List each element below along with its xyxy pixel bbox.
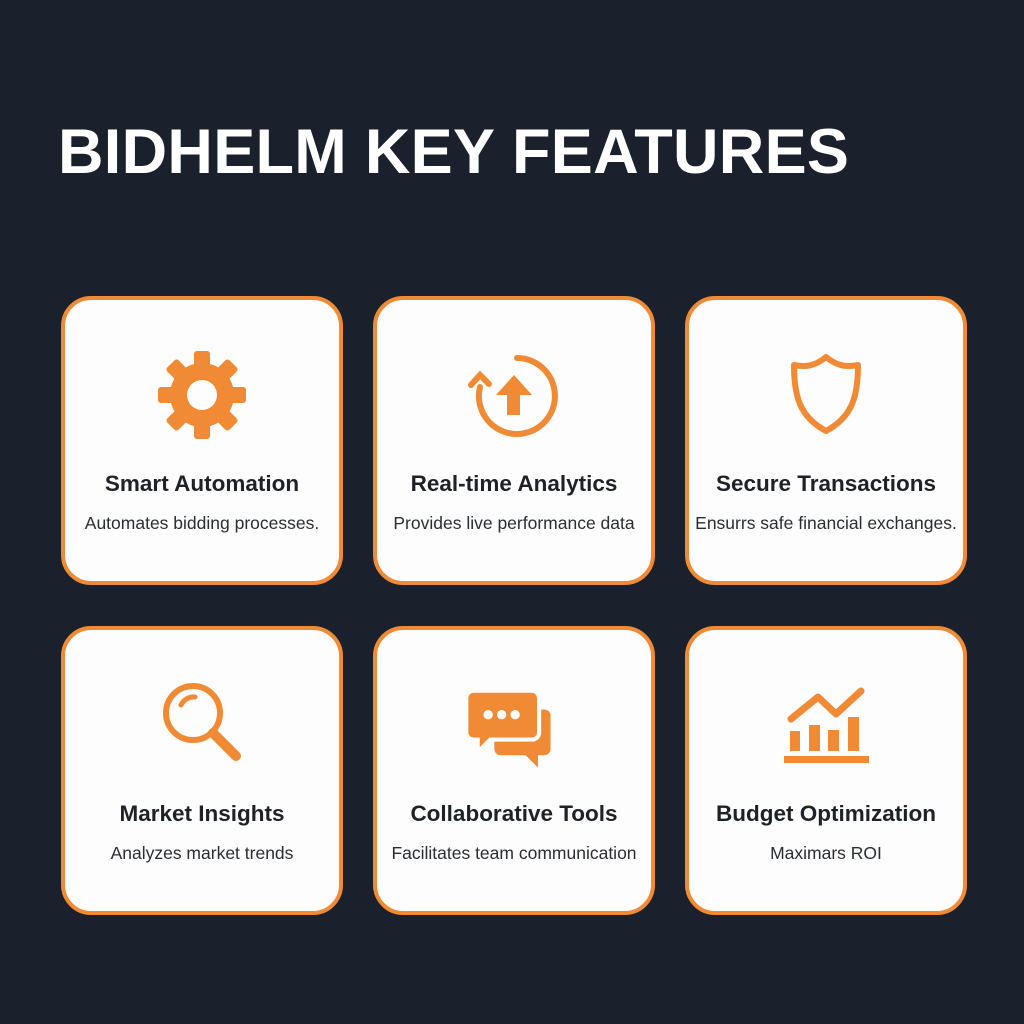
heading: Smart Automation [105,471,299,496]
icon: shield [791,354,861,434]
heading: Budget Optimization [716,801,936,826]
card: market insights [61,626,343,915]
title: BIDHELM KEY FEATURES [58,117,849,187]
icon: refresh arrow up [468,355,558,437]
description: Facilitates team communication [391,843,637,863]
card: budget optimization [685,626,967,915]
description: Ensurrs safe financial exchanges. [695,513,957,533]
heading: Real-time Analytics [411,471,617,496]
card: smart automation [61,296,343,585]
heading: Collaborative Tools [410,801,618,826]
description: Analyzes market trends [111,843,293,863]
card: collaborative tools [373,626,655,915]
card: secure transactions [685,296,967,585]
icon: chat bubbles [468,692,550,768]
card: real-time analytics [373,296,655,585]
description: Maximars ROI [770,843,882,863]
icon: gear [158,351,246,439]
icon: magnifier [163,683,241,761]
heading: Secure Transactions [716,471,936,496]
description: Provides live performance data [393,513,635,533]
description: Automates bidding processes. [85,513,319,533]
heading: Market Insights [119,801,285,826]
icon: bar chart trend [784,688,869,763]
